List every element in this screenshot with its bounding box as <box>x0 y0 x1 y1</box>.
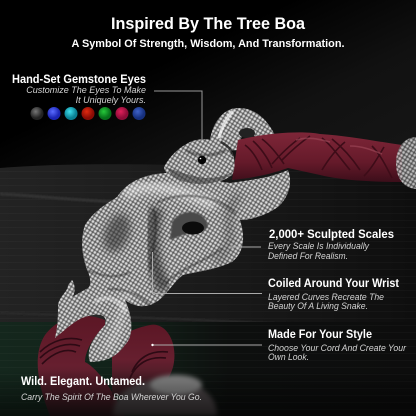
callout: coiled: Layered Curves Recreate The <box>268 292 384 302</box>
silver bead bottom (blurred) <box>113 375 217 416</box>
title: Inspired By The Tree Boa <box>111 14 306 33</box>
callout: gemstone eyes: Customize The Eyes To Make <box>26 85 146 95</box>
gemstone colour swatches <box>30 107 146 120</box>
callout: style <box>268 327 407 362</box>
bottom vignette <box>0 370 416 416</box>
callout: scales: 2,000+ Sculpted Scales <box>269 227 394 241</box>
background: lower surface <box>0 322 416 416</box>
leader line: eyes <box>154 91 202 140</box>
callout: coiled: Beauty Of A Living Snake. <box>268 301 368 311</box>
background: dark top <box>0 0 416 200</box>
leader line: scales <box>230 246 261 248</box>
leader line: coiled <box>152 252 262 294</box>
snake <box>55 139 290 362</box>
callout: coiled <box>268 276 399 311</box>
callout: coiled: Coiled Around Your Wrist <box>268 276 399 290</box>
callout: style: Own Look. <box>268 352 309 362</box>
silver end bead right <box>396 137 416 189</box>
callout: gemstone eyes: It Uniquely Yours. <box>76 95 146 105</box>
leader line: style <box>151 344 262 346</box>
closing tagline <box>21 374 202 402</box>
callout: scales: Every Scale Is Individually <box>268 241 369 251</box>
callout: style: Choose Your Cord And Create Your <box>268 343 407 353</box>
callout: style: Made For Your Style <box>268 327 372 341</box>
callout: scales <box>268 227 394 261</box>
snake: body silhouette <box>55 170 290 362</box>
background: dark book <box>0 164 416 330</box>
snake: coil centre hole <box>170 212 208 240</box>
snake: shading and highlights <box>87 187 240 350</box>
callout: gemstone eyes: Hand-Set Gemstone Eyes <box>12 72 146 86</box>
snake: back arc <box>210 108 275 152</box>
closing tagline: Wild. Elegant. Untamed. <box>21 374 145 388</box>
callout: scales: Defined For Realism. <box>268 251 348 261</box>
snake: head <box>164 139 235 184</box>
subtitle: A Symbol Of Strength, Wisdom, And Transformation. <box>72 38 344 50</box>
burgundy cord right <box>232 132 402 182</box>
callout: gemstone eyes <box>12 72 146 105</box>
burgundy cord loops lower <box>38 316 174 416</box>
closing tagline: Carry The Spirit Of The Boa Wherever You Go. <box>21 392 202 402</box>
